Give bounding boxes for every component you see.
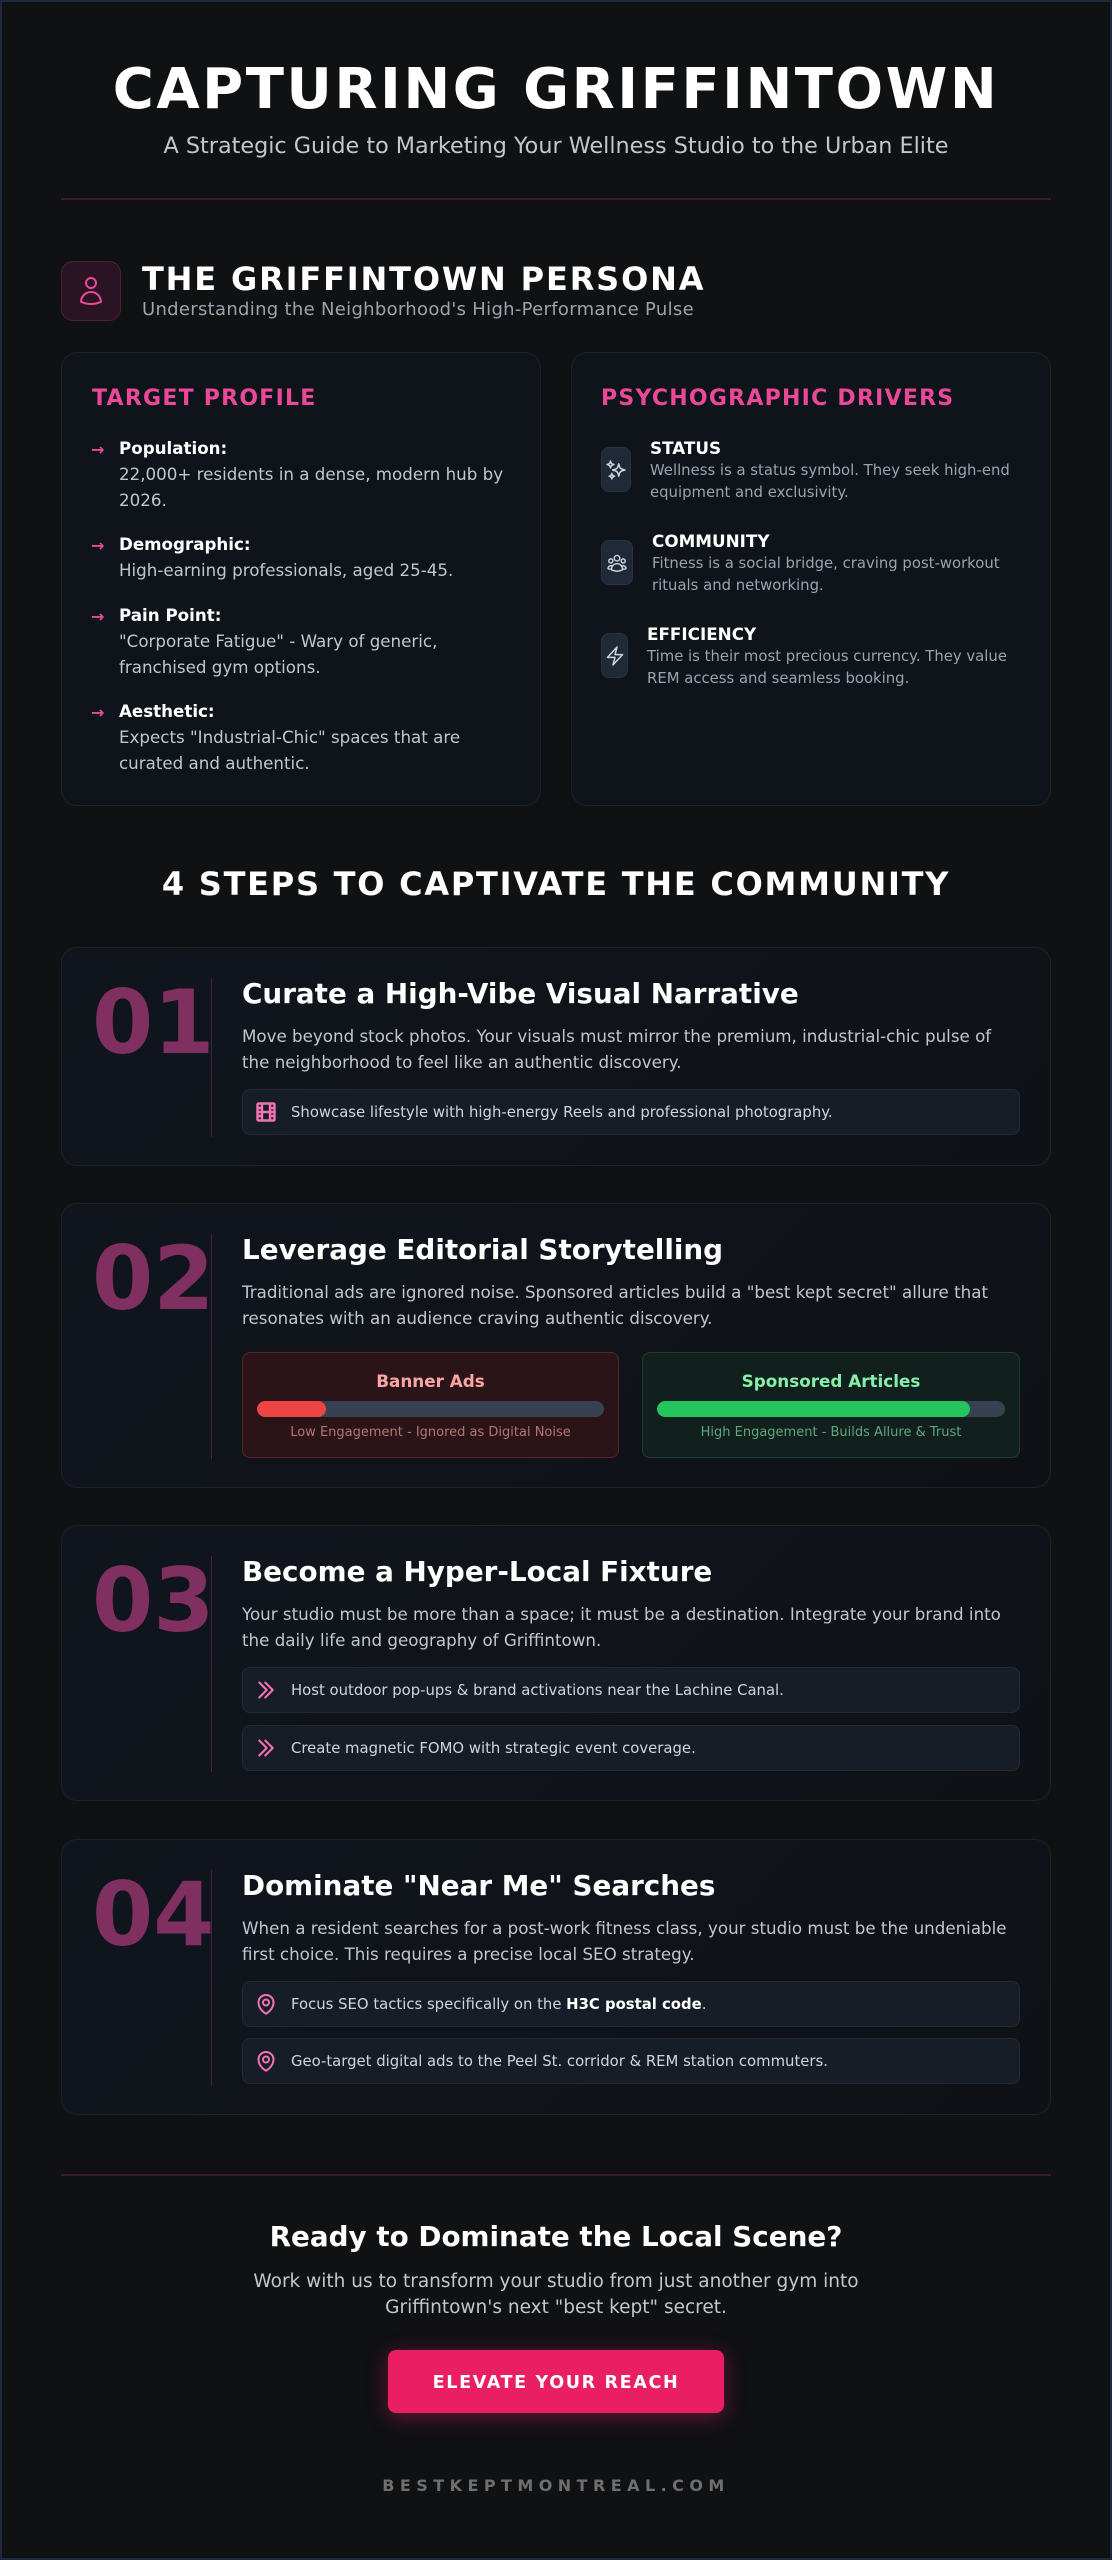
item: population: Population: bbox=[119, 438, 227, 458]
icon: bolt bbox=[601, 633, 628, 678]
panel: psychographic drivers bbox=[571, 352, 1051, 806]
footer URL: BESTKEPTMONTREAL.COM bbox=[382, 2476, 730, 2495]
footer divider bbox=[61, 2174, 1051, 2176]
item: pain point bbox=[91, 605, 437, 677]
step title: Curate a High-Vibe Visual Narrative bbox=[242, 977, 799, 1010]
item: aesthetic bbox=[91, 701, 460, 773]
panel heading: PSYCHOGRAPHIC DRIVERS bbox=[601, 386, 954, 411]
step description: Your studio must be more than a space; it must be a destination. Integrate your brand into bbox=[242, 1604, 1001, 1624]
header divider bbox=[61, 198, 1051, 200]
step number: 03 bbox=[92, 1549, 214, 1652]
step 4 bbox=[61, 1839, 1051, 2115]
step description bbox=[242, 1604, 1001, 1650]
item: demographic bbox=[91, 534, 453, 580]
CTA heading: Ready to Dominate the Local Scene? bbox=[270, 2220, 842, 2253]
step 2 bbox=[61, 1203, 1051, 1488]
comparison: sponsored articles bbox=[642, 1352, 1020, 1458]
section header: persona bbox=[61, 260, 705, 321]
driver: status bbox=[601, 438, 1010, 501]
driver description: equipment and exclusivity. bbox=[650, 483, 849, 501]
icon: user bbox=[61, 261, 121, 321]
icon: film bbox=[256, 1102, 276, 1122]
icon: map pin bbox=[258, 1994, 274, 2015]
driver name: COMMUNITY bbox=[652, 531, 770, 551]
step description bbox=[242, 1282, 988, 1328]
step description: the daily life and geography of Griffintown. bbox=[242, 1630, 601, 1650]
step description: the neighborhood to feel like an authentic discovery. bbox=[242, 1052, 682, 1072]
callout: postal code: Focus SEO tactics specifically on the H3C postal code. bbox=[291, 1995, 706, 2013]
step title: Dominate "Near Me" Searches bbox=[242, 1869, 715, 1902]
item: pain point: → bbox=[91, 607, 104, 626]
item: population: 22,000+ residents in a dense, modern hub by bbox=[119, 464, 503, 484]
step description: Traditional ads are ignored noise. Sponsored articles build a "best kept secret" allure that bbox=[242, 1282, 988, 1302]
label: Banner Ads bbox=[376, 1371, 485, 1391]
step number: 02 bbox=[92, 1227, 214, 1330]
item: pain point: franchised gym options. bbox=[119, 657, 321, 677]
step description: When a resident searches for a post-work fitness class, your studio must be the undeniable bbox=[242, 1918, 1007, 1938]
driver description: Fitness is a social bridge, craving post-workout bbox=[652, 554, 1000, 572]
item: pain point: "Corporate Fatigue" - Wary of generic, bbox=[119, 631, 437, 651]
panel heading: TARGET PROFILE bbox=[92, 386, 317, 411]
item: population bbox=[91, 438, 503, 510]
CTA text: Griffintown's next "best kept" secret. bbox=[385, 2297, 727, 2318]
comparison: banner ads bbox=[242, 1352, 619, 1458]
label: Sponsored Articles bbox=[742, 1371, 920, 1391]
driver description: Time is their most precious currency. They value bbox=[647, 647, 1007, 665]
icon: map pin bbox=[258, 2051, 274, 2072]
item: aesthetic: curated and authentic. bbox=[119, 753, 310, 773]
callout: lifestyle: Showcase lifestyle with high-energy Reels and professional photography. bbox=[291, 1103, 833, 1121]
CTA button bbox=[388, 2350, 724, 2413]
step description: Move beyond stock photos. Your visuals must mirror the premium, industrial-chic pulse of bbox=[242, 1026, 991, 1046]
callout: FOMO: Create magnetic FOMO with strategic event coverage. bbox=[291, 1739, 696, 1757]
item: aesthetic: Expects "Industrial-Chic" spaces that are bbox=[119, 727, 460, 747]
callout: pop-ups: Host outdoor pop-ups & brand activations near the Lachine Canal. bbox=[291, 1681, 784, 1699]
step description: resonates with an audience craving authentic discovery. bbox=[242, 1308, 712, 1328]
icon: sparkles bbox=[601, 447, 631, 492]
driver name: EFFICIENCY bbox=[647, 624, 756, 644]
subtitle: A Strategic Guide to Marketing Your Wellness Studio to the Urban Elite bbox=[164, 133, 948, 159]
item: pain point: Pain Point: bbox=[119, 605, 221, 625]
steps heading: 4 STEPS TO CAPTIVATE THE COMMUNITY bbox=[162, 865, 950, 903]
driver description: Wellness is a status symbol. They seek high-end bbox=[650, 461, 1010, 479]
caption: Low Engagement - Ignored as Digital Noise bbox=[290, 1425, 571, 1440]
CTA text: Work with us to transform your studio from just another gym into bbox=[253, 2271, 859, 2292]
item: demographic: → bbox=[91, 536, 104, 555]
icon: group bbox=[601, 540, 633, 585]
step description bbox=[242, 1918, 1007, 1964]
step title: Become a Hyper-Local Fixture bbox=[242, 1555, 712, 1588]
driver description bbox=[650, 461, 1010, 501]
callout: geo-target bbox=[242, 2038, 1020, 2084]
step title: Leverage Editorial Storytelling bbox=[242, 1233, 723, 1266]
panel: target profile bbox=[61, 352, 541, 806]
driver: efficiency bbox=[601, 624, 1007, 687]
item: demographic: Demographic: bbox=[119, 534, 251, 554]
callout: geo-target: Geo-target digital ads to the Peel St. corridor & REM station commuters. bbox=[291, 2052, 828, 2070]
callout: pop-ups bbox=[242, 1667, 1020, 1713]
step number: 04 bbox=[92, 1863, 214, 1966]
step description bbox=[242, 1026, 992, 1072]
driver: community bbox=[601, 531, 1000, 594]
CTA button: ELEVATE YOUR REACH bbox=[433, 2373, 679, 2393]
callout: FOMO bbox=[242, 1725, 1020, 1771]
persona heading: THE GRIFFINTOWN PERSONA bbox=[142, 260, 705, 298]
step description: first choice. This requires a precise local SEO strategy. bbox=[242, 1944, 695, 1964]
icon: chevrons bbox=[258, 1740, 274, 1756]
item: aesthetic: Aesthetic: bbox=[119, 701, 215, 721]
caption: High Engagement - Builds Allure & Trust bbox=[701, 1425, 961, 1440]
driver description bbox=[652, 554, 1000, 594]
item: demographic: High-earning professionals, aged 25-45. bbox=[119, 560, 453, 580]
icon: chevrons bbox=[258, 1682, 274, 1698]
item: aesthetic: → bbox=[91, 703, 104, 722]
item: population: → bbox=[91, 440, 104, 459]
engagement bar: low bbox=[257, 1401, 604, 1417]
persona subheading: Understanding the Neighborhood's High-Performance Pulse bbox=[142, 299, 694, 320]
driver description bbox=[646, 647, 1007, 687]
step 3 bbox=[61, 1525, 1051, 1801]
driver name: STATUS bbox=[650, 438, 721, 458]
callout: lifestyle bbox=[242, 1089, 1020, 1135]
engagement bar: high bbox=[657, 1401, 1005, 1417]
driver description: REM access and seamless booking. bbox=[647, 669, 909, 687]
CTA text bbox=[253, 2271, 859, 2318]
step number: 01 bbox=[92, 971, 214, 1074]
item: population: 2026. bbox=[119, 490, 167, 510]
driver description: rituals and networking. bbox=[652, 576, 824, 594]
title: CAPTURING GRIFFINTOWN bbox=[113, 57, 999, 122]
step 1 bbox=[61, 947, 1051, 1166]
callout: postal code bbox=[242, 1981, 1020, 2027]
